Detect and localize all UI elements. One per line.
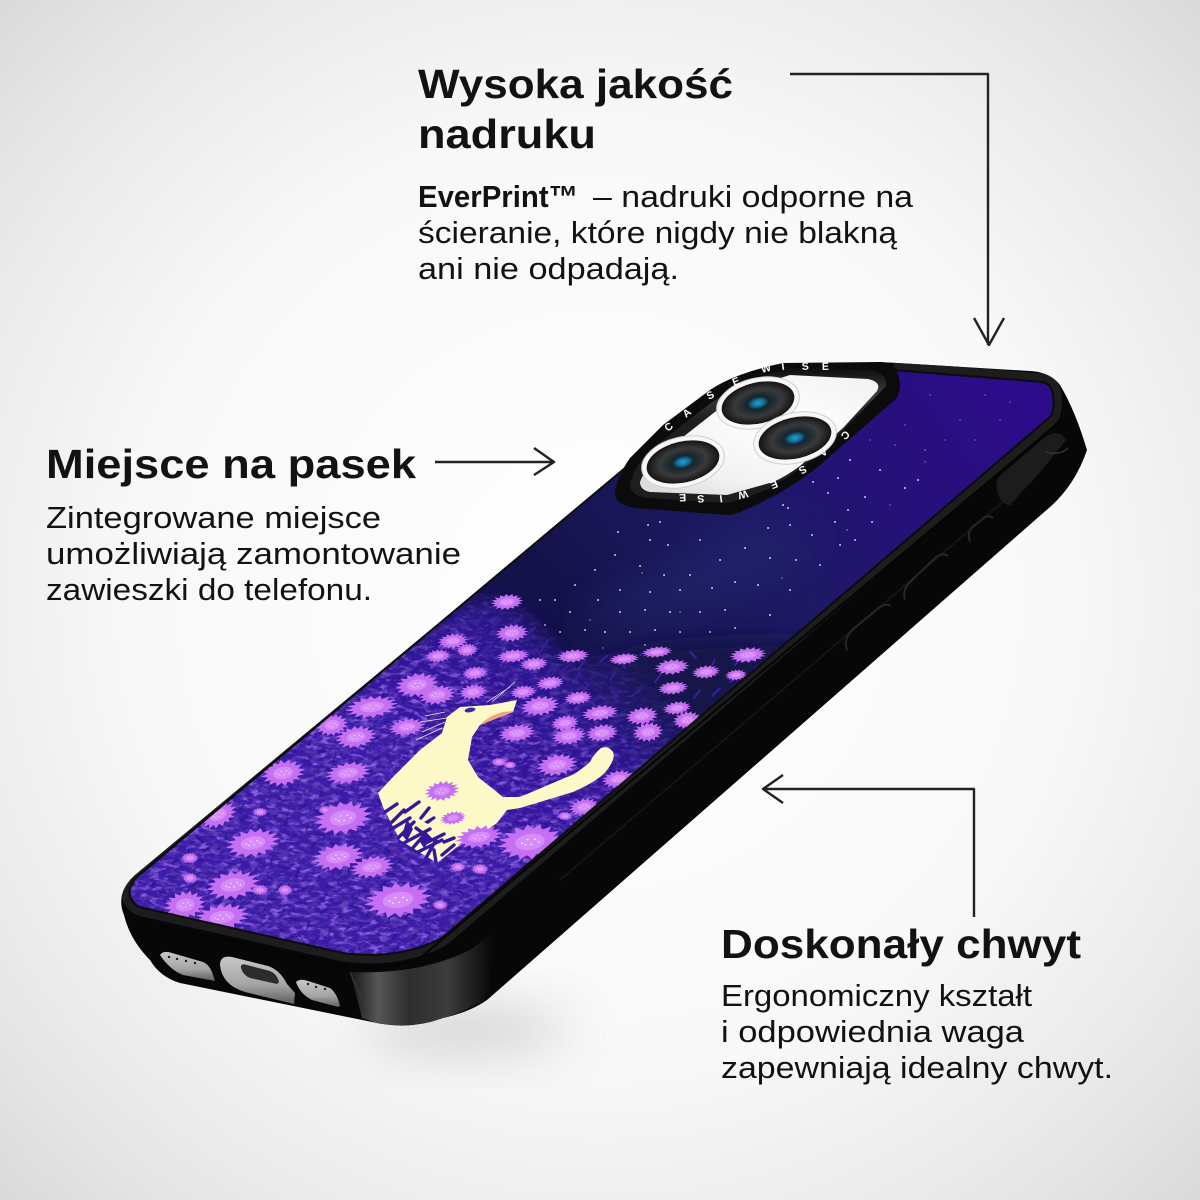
heading: nadruku	[418, 111, 596, 157]
printed back	[130, 371, 1053, 954]
side button: volume	[904, 554, 948, 600]
camera module	[615, 361, 900, 515]
body text: EverPrint™	[418, 180, 578, 214]
camera bumper	[615, 362, 900, 515]
side button: action	[846, 605, 891, 650]
heading: Doskonały chwyt	[721, 921, 1081, 967]
camera glass	[640, 375, 878, 495]
case body	[121, 362, 1087, 1026]
body text: zawieszki do telefonu.	[46, 573, 372, 607]
side button: small	[969, 516, 993, 542]
strap slot	[996, 433, 1066, 505]
cat mouth	[480, 711, 515, 725]
screen edge highlight	[129, 370, 1054, 955]
arrow: to case back	[790, 74, 1004, 345]
arrow: to side	[763, 775, 974, 917]
stars	[540, 460, 918, 645]
callout: grip	[721, 775, 1113, 1085]
cat	[378, 682, 614, 863]
heading: Wysoka jakość	[418, 61, 733, 107]
night sky	[386, 371, 1053, 672]
heading: Miejsce na pasek	[46, 441, 416, 487]
cat whiskers	[416, 682, 515, 740]
meadow texture	[130, 594, 686, 954]
flower meadow	[130, 591, 790, 954]
usb port	[220, 957, 295, 1004]
body text: – nadruki odporne na	[593, 180, 913, 214]
body text	[721, 979, 1113, 1085]
body text: Zintegrowane miejsce	[46, 501, 381, 535]
body text: ani nie odpadają.	[418, 252, 679, 286]
lens left	[636, 428, 730, 496]
right speaker	[296, 980, 340, 1007]
grass over cat	[385, 802, 454, 862]
cat body	[378, 700, 614, 863]
phone case	[121, 362, 1087, 1026]
body text: umożliwiają zamontowanie	[46, 537, 461, 571]
stems and leaves at meadow edge	[473, 615, 763, 699]
bumper inner bevel	[630, 368, 886, 503]
heading	[418, 61, 733, 157]
bumper lettering top: CASEWISE	[662, 361, 829, 434]
body text: Ergonomiczny kształt	[721, 979, 1033, 1013]
body text: i odpowiednia waga	[721, 1015, 1024, 1049]
callout: print quality	[418, 61, 1004, 345]
inner rim	[129, 370, 1062, 968]
flowers	[163, 593, 767, 933]
arrow: to bumper	[435, 448, 554, 475]
body text: zapewniają idealny chwyt.	[721, 1051, 1113, 1085]
left speaker	[160, 952, 215, 981]
body text: ścieranie, które nigdy nie blakną	[418, 216, 897, 250]
bumper lettering bottom: CASEWISE	[679, 428, 852, 504]
body text	[46, 501, 461, 607]
lower gloss corner	[350, 932, 495, 1026]
phone shadow	[360, 1010, 570, 1050]
lens top	[711, 369, 805, 437]
lens right	[748, 404, 842, 472]
callout: strap slot	[46, 441, 554, 607]
body text	[418, 180, 913, 286]
side seam	[560, 470, 1040, 880]
cat eye	[464, 708, 476, 712]
